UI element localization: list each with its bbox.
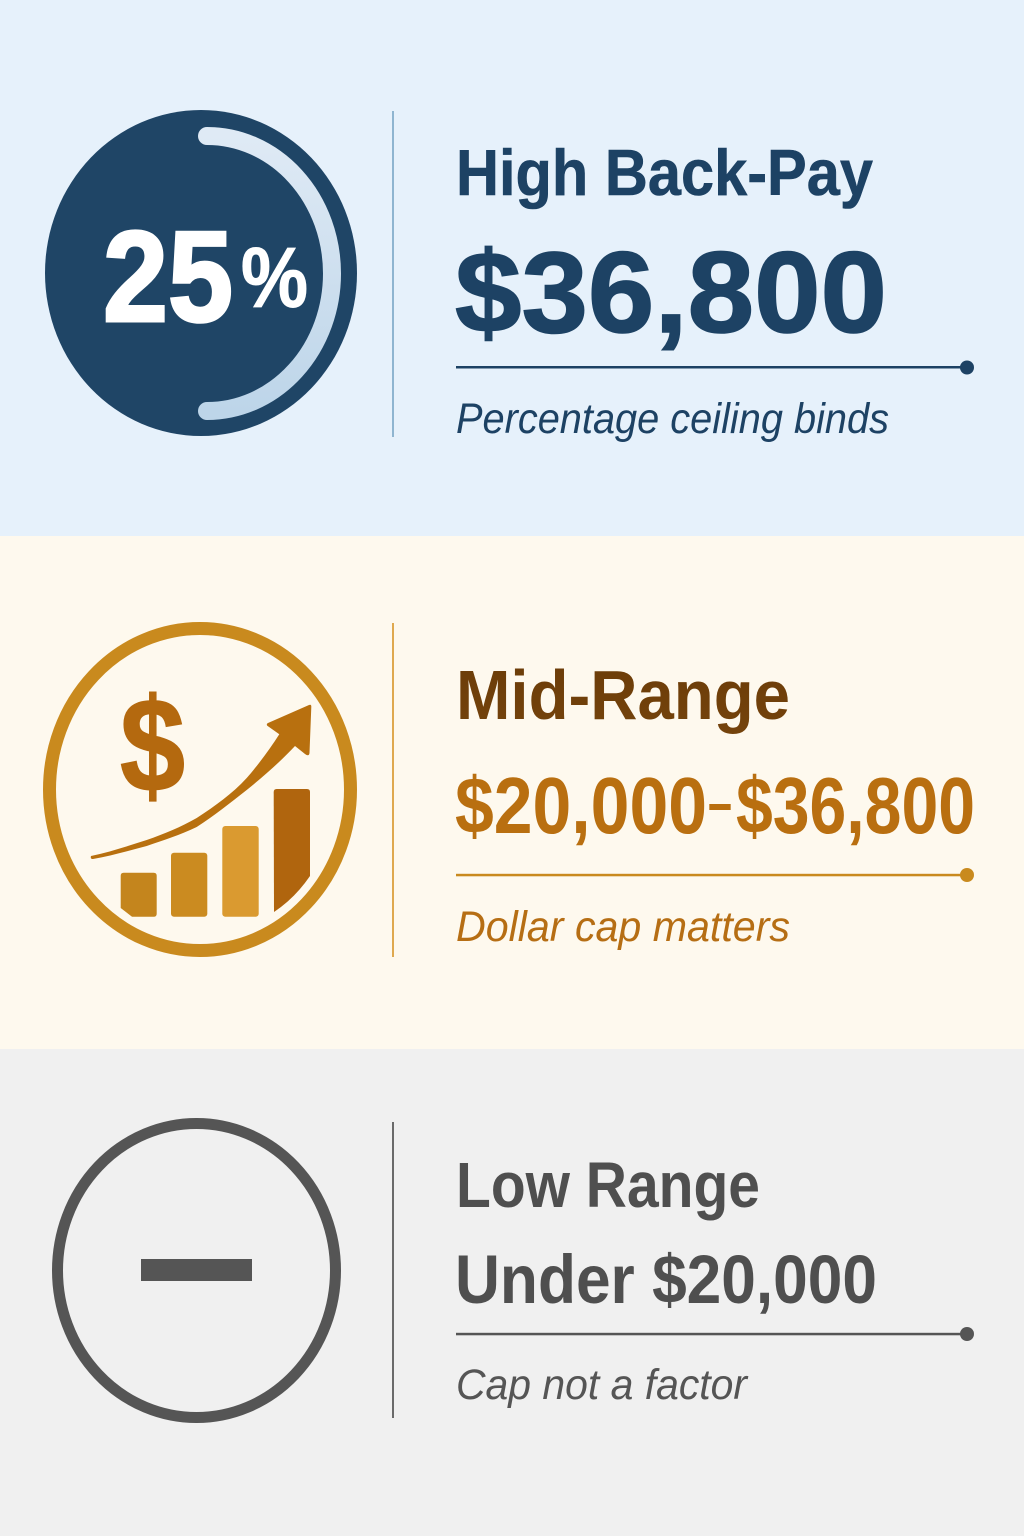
rule with dot <box>456 360 974 374</box>
caption: cap not a factor: Cap not a factor <box>456 1361 749 1409</box>
dollar sign: $ <box>120 672 185 820</box>
heading: low range: Low Range <box>456 1149 760 1221</box>
panel: high back-pay <box>0 0 1024 536</box>
rule with dot <box>456 868 974 882</box>
amount: 36,800: $36,800 <box>455 229 887 357</box>
rule with dot <box>456 1327 974 1341</box>
caption: percentage ceiling binds: Percentage ceiling binds <box>456 395 889 443</box>
heading: mid-range: Mid-Range <box>456 656 790 734</box>
bar 2 <box>171 853 207 917</box>
icon: dollar, arrow and bars <box>50 628 350 950</box>
growth arrow <box>91 705 311 859</box>
bar 1 <box>121 873 157 917</box>
bar 3 <box>222 826 259 917</box>
amount: 20,000 to 36,800: – <box>708 769 732 836</box>
icon: minus in circle <box>58 1124 336 1418</box>
bar 4 <box>274 789 310 912</box>
amount: under 20,000: Under $20,000 <box>455 1241 877 1318</box>
amount: 20,000 to 36,800: $20,000 <box>455 761 707 850</box>
heading: high back-pay: High Back-Pay <box>456 136 873 209</box>
amount: 20,000 to 36,800 <box>455 761 975 850</box>
panel: mid-range <box>0 536 1024 1049</box>
amount: 20,000 to 36,800: $36,800 <box>736 761 975 850</box>
icon: 25 percent badge: % <box>241 231 308 326</box>
caption: dollar cap matters: Dollar cap matters <box>456 903 790 951</box>
icon: 25 percent badge <box>45 110 357 436</box>
panel: low range <box>0 1049 1024 1536</box>
icon: 25 percent badge: 25 <box>103 205 233 349</box>
